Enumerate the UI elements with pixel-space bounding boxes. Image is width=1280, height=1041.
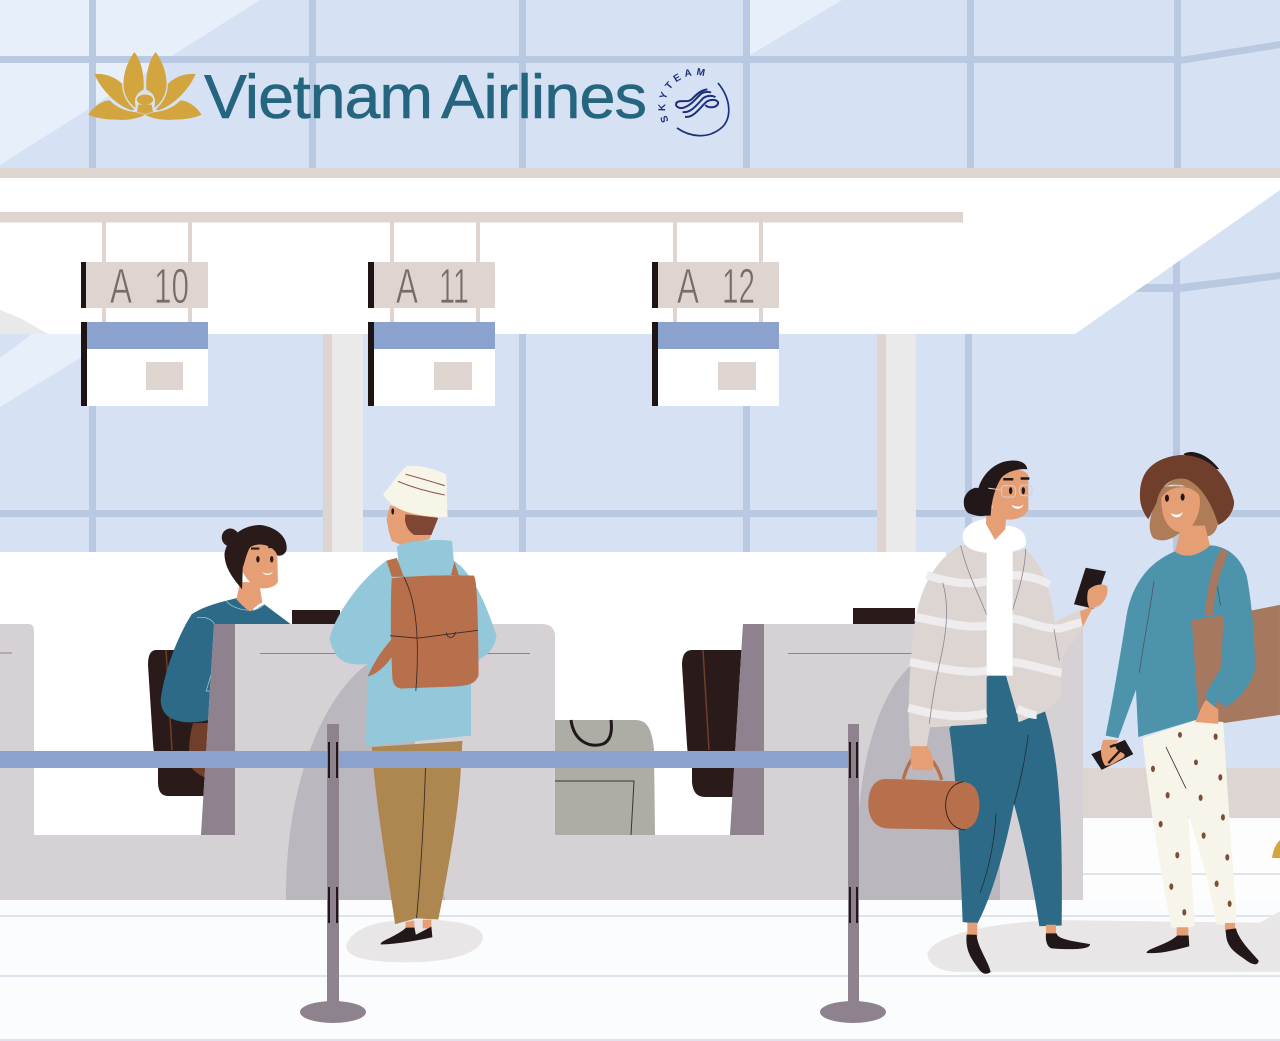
sign: counter A 11: 11 bbox=[439, 260, 469, 314]
woman with hat bbox=[1091, 452, 1280, 964]
check-in counters bbox=[0, 624, 1083, 900]
sweater bbox=[1106, 545, 1255, 738]
pillar right bbox=[877, 334, 916, 554]
trousers bbox=[949, 676, 1062, 926]
feet bbox=[1177, 923, 1235, 937]
sign: counter A 10: A bbox=[110, 260, 132, 314]
bucket hat bbox=[383, 466, 448, 517]
duffel bag bbox=[903, 758, 942, 780]
logo: Vietnam Airlines bbox=[88, 52, 730, 136]
sign: counter A 11: A bbox=[396, 260, 418, 314]
wordmark bbox=[204, 63, 646, 132]
ceiling canopy bbox=[0, 168, 1280, 334]
shirt and hood bbox=[987, 547, 1013, 676]
icon: SkyTeam badge bbox=[658, 68, 730, 136]
sign: counter A 12 bbox=[652, 222, 779, 406]
feet bbox=[967, 923, 1056, 937]
passengers on the right bbox=[868, 452, 1280, 974]
sign: counter A 10 bbox=[81, 222, 208, 406]
agent head bbox=[240, 543, 278, 588]
stanchion left bbox=[300, 724, 366, 1023]
neck and face bbox=[1175, 526, 1210, 556]
check-in agent bbox=[161, 525, 292, 722]
sign: counter A 11 bbox=[368, 222, 495, 406]
counter 2 chair bbox=[682, 650, 746, 797]
trousers bbox=[1143, 720, 1237, 928]
back wall and floor bbox=[0, 552, 1280, 1041]
hair back bbox=[1150, 486, 1219, 540]
bag strap and front bbox=[1205, 548, 1228, 616]
passenger at counter bbox=[330, 466, 497, 962]
counter 1 screen bbox=[292, 610, 340, 625]
floor shadow bbox=[346, 919, 483, 962]
arm and hand with phone bbox=[1055, 608, 1090, 661]
trousers bbox=[372, 741, 462, 924]
agent body bbox=[161, 598, 292, 722]
luggage behind counter bbox=[555, 720, 655, 835]
counter 2 screen bbox=[853, 608, 915, 625]
wordmark: Vietnam bbox=[204, 63, 432, 132]
stanchion right bbox=[820, 724, 886, 1023]
woman with glasses bbox=[868, 461, 1107, 974]
hand with phone bbox=[1091, 740, 1133, 770]
agent chair bbox=[148, 650, 218, 796]
icon: golden lotus bbox=[88, 52, 202, 120]
hand in pocket bbox=[1195, 700, 1218, 724]
backpack bbox=[387, 558, 459, 577]
legs and shoes bbox=[405, 919, 431, 930]
airport window background bbox=[0, 0, 1280, 660]
head bbox=[387, 505, 437, 545]
jacket bbox=[330, 540, 497, 746]
sign: counter A 10: 10 bbox=[154, 260, 189, 314]
striped coat bbox=[909, 545, 987, 746]
floor shadow bbox=[927, 911, 1280, 972]
sign: counter A 12: A bbox=[677, 260, 699, 314]
sign: counter A 12: 12 bbox=[722, 260, 755, 314]
neck and head bbox=[986, 508, 1007, 540]
pillar left bbox=[323, 334, 363, 554]
icon: SkyTeam badge: SKYTEAM bbox=[658, 68, 705, 122]
queue rope bbox=[0, 751, 848, 768]
tote bag bbox=[1192, 605, 1280, 724]
wordmark: Airlines bbox=[441, 63, 646, 132]
hat bbox=[1183, 452, 1219, 469]
